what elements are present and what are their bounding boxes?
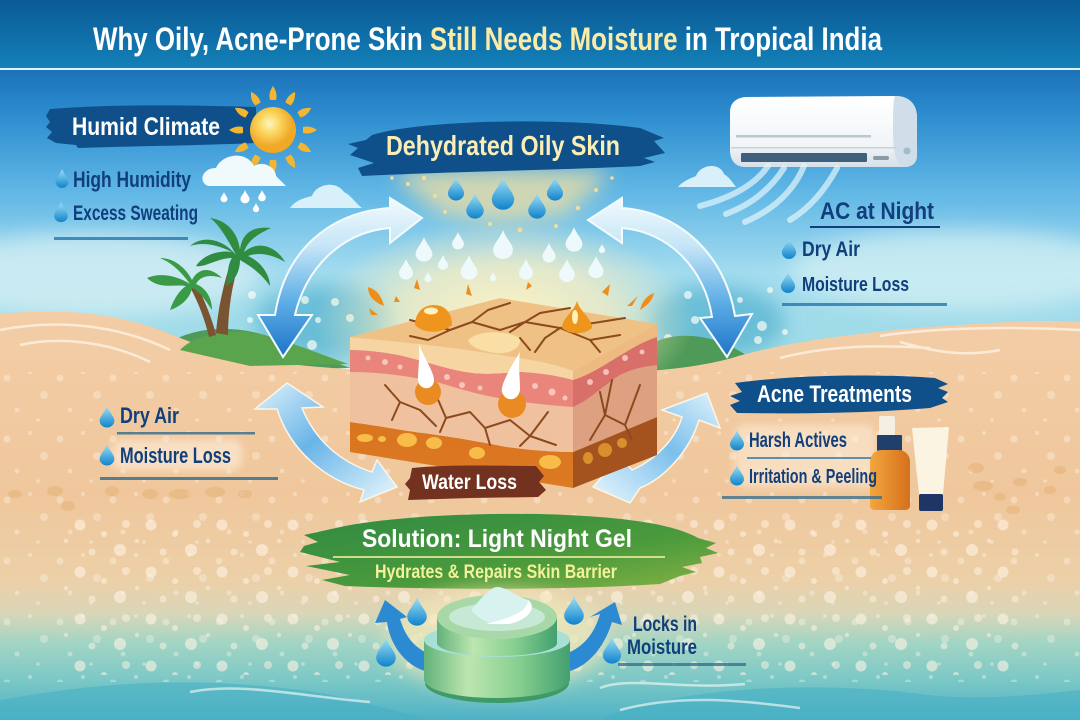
heading: solution: Solution: Light Night Gel bbox=[362, 525, 632, 553]
heading: acne treatments: Acne Treatments bbox=[757, 381, 912, 408]
text highlight bbox=[735, 425, 875, 487]
icon: drop bbox=[100, 406, 114, 428]
icon: cream tube bbox=[912, 427, 949, 511]
splash marks bbox=[368, 279, 654, 315]
skin: rim side bbox=[573, 324, 657, 380]
panel: acne treatments bbox=[722, 375, 949, 511]
background: central glow bbox=[315, 220, 695, 420]
background: foam lines on sand bbox=[0, 324, 1080, 362]
skin: top face bbox=[350, 298, 657, 371]
text: harsh actives: Harsh Actives bbox=[749, 429, 847, 452]
arrow: right lock arrow bbox=[570, 602, 622, 671]
skin: fat layer side bbox=[573, 417, 657, 488]
arrow: right double arrow bbox=[593, 393, 720, 503]
skin: pink pores bbox=[366, 350, 644, 400]
banner: humid climate bbox=[46, 105, 256, 148]
background: golden haze under banner bbox=[395, 169, 610, 222]
background: sky bbox=[0, 68, 1080, 368]
icon: rain cloud bbox=[202, 156, 286, 212]
small palm trunk bbox=[190, 285, 216, 337]
skin: side globules bbox=[583, 438, 627, 464]
title banner bbox=[0, 0, 1080, 70]
icon: drop bbox=[781, 272, 795, 293]
icon: drop bbox=[54, 202, 68, 222]
icon: drop bbox=[730, 465, 744, 486]
arrow: left double arrow bbox=[255, 383, 397, 502]
icon: cloud near AC bbox=[678, 166, 736, 187]
title text: Why Oily, Acne-Prone Skin Still Needs Moisture in Tropical India bbox=[93, 21, 882, 57]
skin cross-section bbox=[350, 279, 657, 488]
brush stroke: green bbox=[300, 514, 718, 589]
icon: drop bbox=[782, 238, 796, 259]
background: small sand dots bbox=[0, 372, 1080, 682]
background: sand and shallow water bbox=[0, 312, 1080, 720]
skin: dermis cracks bbox=[385, 380, 640, 446]
background: teal shore right bbox=[645, 286, 785, 358]
icon: sun bbox=[229, 86, 317, 174]
arrow: left lock arrow bbox=[375, 600, 425, 671]
icon: drop bbox=[730, 430, 744, 450]
background: large sand dots bbox=[60, 515, 1020, 675]
icon: gel jar bbox=[424, 587, 570, 703]
big palm trunk bbox=[216, 258, 240, 335]
text: locks in moisture bbox=[618, 613, 746, 666]
background: golden specks under banner bbox=[390, 176, 614, 232]
heading: humid climate: Humid Climate bbox=[72, 113, 220, 141]
text: moisture loss: Moisture Loss bbox=[802, 274, 909, 296]
text: irritation and peeling: Irritation & Peeling bbox=[749, 466, 877, 488]
background: pale haze left bbox=[0, 233, 260, 317]
text: high humidity: High Humidity bbox=[73, 167, 192, 192]
text: locks in moisture: Moisture bbox=[627, 636, 697, 659]
background: teal shore left bbox=[255, 286, 395, 358]
palm ground bushes bbox=[180, 332, 348, 366]
banner: acne treatments bbox=[730, 375, 948, 413]
arrow: AC to skin bbox=[588, 198, 752, 357]
heading: dehydrated oily skin: Dehydrated Oily Skin bbox=[386, 130, 620, 161]
panel: AC at night bbox=[700, 96, 947, 306]
blue drops bbox=[448, 177, 563, 219]
subheading: hydrates and repairs: Hydrates & Repairs Skin Barrier bbox=[375, 562, 618, 583]
text: excess sweating: Excess Sweating bbox=[73, 202, 198, 225]
background: water ripples bbox=[0, 682, 1080, 720]
text highlight bbox=[112, 440, 242, 470]
heading: AC at night: AC at Night bbox=[820, 198, 934, 225]
icon: small cloud bbox=[290, 185, 362, 208]
background: tan spots left bbox=[8, 486, 252, 511]
skin: dermis front bbox=[350, 372, 573, 452]
gel swirl bbox=[471, 587, 532, 624]
background: green shoreline bbox=[165, 329, 750, 372]
panel: humid climate bbox=[46, 86, 317, 240]
panel: left dry air bbox=[100, 403, 278, 480]
skin: rim front bbox=[350, 337, 573, 380]
text: dry air: Dry Air bbox=[120, 403, 179, 428]
banner: water loss bbox=[405, 466, 546, 500]
background: tan spots right bbox=[968, 463, 1066, 514]
background: pale haze right bbox=[790, 230, 1080, 310]
skin: top face pale patch bbox=[468, 332, 520, 353]
skin: pink layer side bbox=[573, 337, 657, 407]
text: locks in moisture: Locks in bbox=[633, 613, 697, 636]
icon: palm trees bbox=[147, 218, 348, 366]
icon: drop bbox=[100, 444, 114, 466]
text: dry air: Dry Air bbox=[802, 238, 860, 261]
background: ripple foam bbox=[190, 683, 800, 710]
arrow: humid climate to skin bbox=[258, 198, 422, 357]
big palm crown bbox=[190, 218, 285, 286]
skin: fat layer front bbox=[350, 422, 573, 488]
skin: fat globules bbox=[357, 433, 561, 469]
white drops bbox=[399, 227, 605, 282]
skin: dermis side bbox=[573, 365, 657, 452]
banner: dehydrated oily skin bbox=[348, 121, 665, 176]
icon: serum bottle bbox=[870, 416, 910, 510]
text: moisture loss: Moisture Loss bbox=[120, 443, 231, 468]
skin: white pus pores bbox=[415, 344, 526, 418]
icon: moisture drops around jar bbox=[376, 596, 621, 667]
skin: pink layer front bbox=[350, 350, 573, 407]
small palm crown bbox=[147, 258, 222, 310]
background: shore dots bbox=[247, 287, 788, 350]
background: jar glow bbox=[387, 590, 607, 690]
skin: top cracks bbox=[410, 303, 625, 352]
AC end cap bbox=[893, 96, 917, 167]
icon: air conditioner bbox=[700, 96, 917, 222]
banner: solution bbox=[300, 514, 718, 589]
water droplets falling bbox=[399, 177, 605, 282]
text: water loss: Water Loss bbox=[422, 471, 517, 494]
air flow lines bbox=[700, 166, 837, 222]
icon: drop bbox=[56, 169, 68, 188]
skin: oil blobs bbox=[415, 301, 592, 333]
